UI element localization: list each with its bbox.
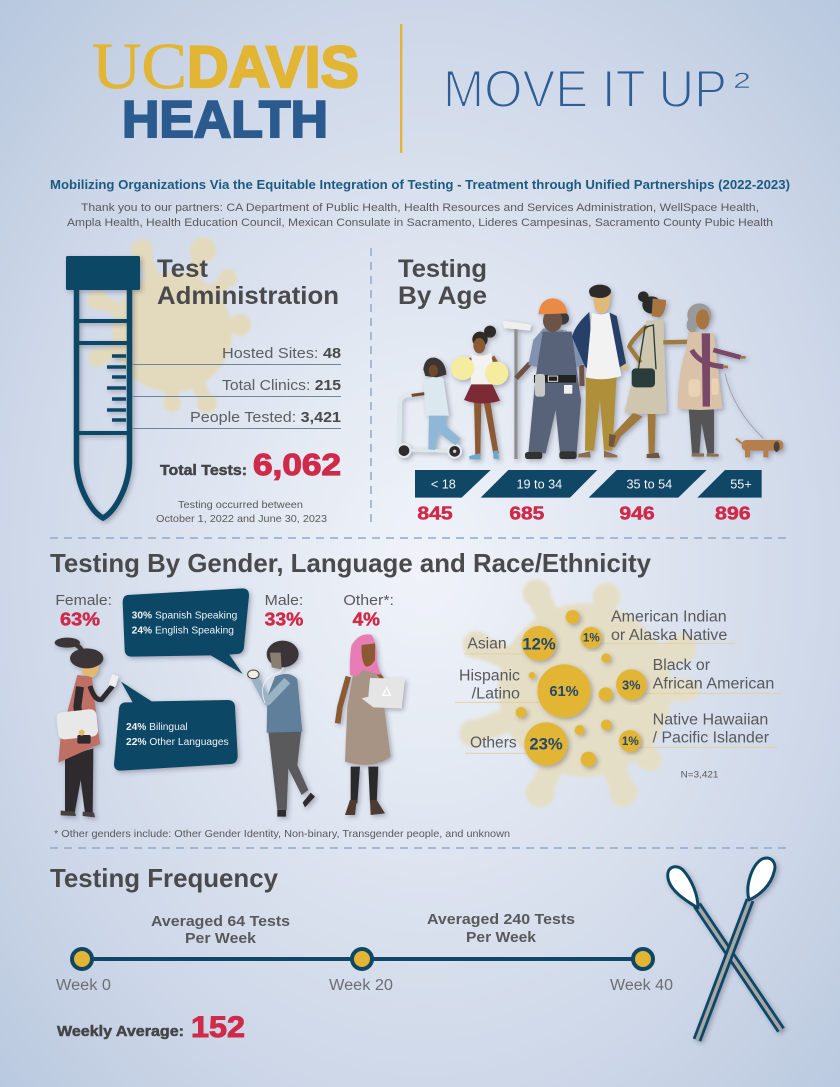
- stat: male: Male:: [265, 592, 303, 609]
- heading: testing by age: Testing: [398, 255, 487, 283]
- age band: 55 plus: 55+: [730, 477, 752, 491]
- figure: woman with bag: [609, 291, 693, 458]
- stat: female: Female:: [55, 592, 112, 609]
- marker: week 40: [610, 949, 673, 994]
- subtitle: Mobilizing Organizations Via the Equitable Integration of Testing - Treatment through Unified Partnerships (2022-2023): [50, 178, 790, 192]
- stat: american indian: 1%: [583, 632, 600, 645]
- stat: hispanic latino: Hispanic: [459, 668, 520, 685]
- marker: week 0: Week 0: [56, 977, 111, 994]
- label: second period: Per Week: [466, 930, 537, 946]
- callout: speaking languages: [123, 588, 249, 674]
- stat: total tests: [160, 447, 341, 482]
- stat rules: [132, 364, 341, 428]
- figure: older woman with dog: [678, 303, 783, 457]
- heading: test administration: Administration: [157, 282, 339, 310]
- figure: other: [338, 634, 405, 815]
- stat: native hawaiian: Native Hawaiian: [653, 711, 768, 728]
- label: first period: Averaged 64 Tests: [151, 914, 290, 930]
- figure: cheerleader: [451, 326, 508, 459]
- figure: paint roller: [503, 321, 532, 459]
- stat: american indian: American Indian: [611, 609, 727, 626]
- stat: weekly average: 152: [191, 1011, 245, 1044]
- logo: UC Davis Health: [92, 30, 359, 149]
- figure: male: [248, 641, 315, 817]
- stat: american indian: [580, 609, 727, 648]
- stat: female: [55, 592, 112, 630]
- panel: test administration: [66, 237, 341, 525]
- stat: female: 63%: [60, 609, 100, 630]
- icon: test tube: [66, 256, 140, 518]
- partners text: [67, 202, 773, 229]
- figure: young man: [572, 285, 626, 457]
- panel divider: [370, 248, 372, 527]
- heading: test administration: Test: [157, 255, 209, 283]
- stat: others: Others: [470, 735, 517, 752]
- title: Move It Up: 2: [733, 68, 751, 93]
- age band: 55 plus: 896: [715, 502, 751, 523]
- stat: asian: 12%: [522, 634, 556, 653]
- footnote: * Other genders include: Other Gender Identity, Non-binary, Transgender people, and unknown: [54, 828, 510, 840]
- stat: other: Other*:: [343, 592, 394, 609]
- icon: crossed swabs: [668, 858, 781, 1040]
- virus backdrop: [459, 579, 699, 807]
- label: second period: [427, 912, 575, 946]
- stat: other: 4%: [353, 609, 380, 630]
- testing dates note: [156, 499, 327, 525]
- stat: native hawaiian: / Pacific Islander: [653, 730, 769, 747]
- age band: 35 to 54: 35 to 54: [626, 477, 672, 491]
- logo: UC Davis Health: HEALTH: [122, 91, 328, 149]
- figure: worker: [516, 298, 585, 459]
- stat: weekly average: Weekly Average:: [57, 1023, 184, 1040]
- virus backdrop: [87, 237, 251, 413]
- heading: testing by age: [398, 255, 487, 310]
- stat: male: [265, 592, 304, 630]
- panel: race and ethnicity: [455, 579, 782, 807]
- marker: week 0: [56, 949, 111, 994]
- section divider: [50, 538, 792, 848]
- stat: asian: [467, 626, 556, 661]
- age band: 35 to 54: 946: [619, 502, 655, 523]
- stat: hispanic latino: 61%: [549, 684, 579, 700]
- callout: speaking languages: 30% Spanish Speaking: [132, 610, 237, 621]
- age band: 19 to 34: [481, 470, 597, 523]
- stat: black: 3%: [622, 679, 640, 693]
- callout: bilingual and other: [114, 682, 238, 771]
- stat: others: [470, 722, 568, 766]
- small virus dots: [516, 610, 613, 767]
- timeline: testing frequency: [56, 912, 673, 994]
- age band: under 18: 845: [417, 502, 453, 523]
- callout: bilingual and other: 24% Bilingual: [126, 722, 188, 733]
- age band: 35 to 54: [589, 470, 707, 523]
- marker: week 40: Week 40: [610, 977, 673, 994]
- header divider: [400, 24, 402, 153]
- stat: hispanic latino: /Latino: [472, 685, 520, 702]
- stat: total tests: 6,062: [253, 447, 341, 482]
- label: second period: Averaged 240 Tests: [427, 912, 575, 928]
- figure: female: [55, 638, 119, 817]
- callout: speaking languages: 24% English Speaking: [132, 625, 234, 636]
- illustration: people by age: [397, 285, 783, 459]
- stat: black: Black or: [653, 657, 710, 674]
- heading: testing frequency: Testing Frequency: [50, 863, 279, 893]
- testing dates note: Testing occurred between: [178, 499, 303, 511]
- stat: native hawaiian: 1%: [622, 735, 639, 748]
- stat: native hawaiian: [619, 711, 769, 752]
- callout: bilingual and other: 22% Other Languages: [126, 737, 229, 748]
- age band: under 18: [415, 470, 491, 523]
- stat: total clinics: Total Clinics: 215: [222, 377, 341, 394]
- figure: child on scooter: [397, 358, 462, 459]
- panel: gender and language: [55, 588, 405, 817]
- age band: 19 to 34: 19 to 34: [516, 477, 562, 491]
- marker: week 20: Week 20: [329, 977, 393, 994]
- stat: asian: Asian: [467, 636, 507, 653]
- label: first period: Per Week: [185, 931, 257, 947]
- title: Move It Up: MOVE IT UP: [443, 60, 727, 119]
- stat: total tests: Total Tests:: [160, 462, 247, 479]
- stat: black: African American: [653, 675, 774, 692]
- stat: black: [616, 657, 774, 700]
- testing dates note: October 1, 2022 and June 30, 2023: [156, 513, 327, 525]
- marker: week 20: [329, 949, 393, 994]
- stat: others: 23%: [529, 735, 563, 754]
- stat: people tested: People Tested: 3,421: [190, 409, 341, 426]
- panel: testing by age: [397, 255, 783, 523]
- stat: hosted sites: Hosted Sites: 48: [222, 345, 341, 362]
- label rules: [455, 643, 782, 753]
- age band: 55 plus: [697, 470, 762, 523]
- stat: weekly average: [57, 1011, 245, 1044]
- stat: hispanic latino: [459, 664, 591, 718]
- stat: male: 33%: [265, 609, 304, 630]
- stat: other: [343, 592, 394, 630]
- heading: gender language race: Testing By Gender, Language and Race/Ethnicity: [50, 548, 652, 578]
- stat: american indian: or Alaska Native: [611, 627, 727, 644]
- sample size: N=3,421: [681, 769, 718, 779]
- label: first period: [151, 914, 290, 947]
- heading: testing by age: By Age: [398, 282, 487, 310]
- partners text: Thank you to our partners: CA Department of Public Health, Health Resources and Services Administration, WellSpace Health,: [81, 202, 759, 214]
- logo: UC Davis Health: UC: [92, 30, 187, 103]
- age band: under 18: < 18: [431, 477, 456, 491]
- logo: UC Davis Health: DAVIS: [187, 35, 359, 100]
- heading: test administration: [157, 255, 339, 310]
- age band: 19 to 34: 685: [509, 502, 544, 523]
- partners text: Ampla Health, Health Education Council, Mexican Consulate in Sacramento, Lideres Campesinas, Sacramento County Pubic Health: [67, 217, 773, 229]
